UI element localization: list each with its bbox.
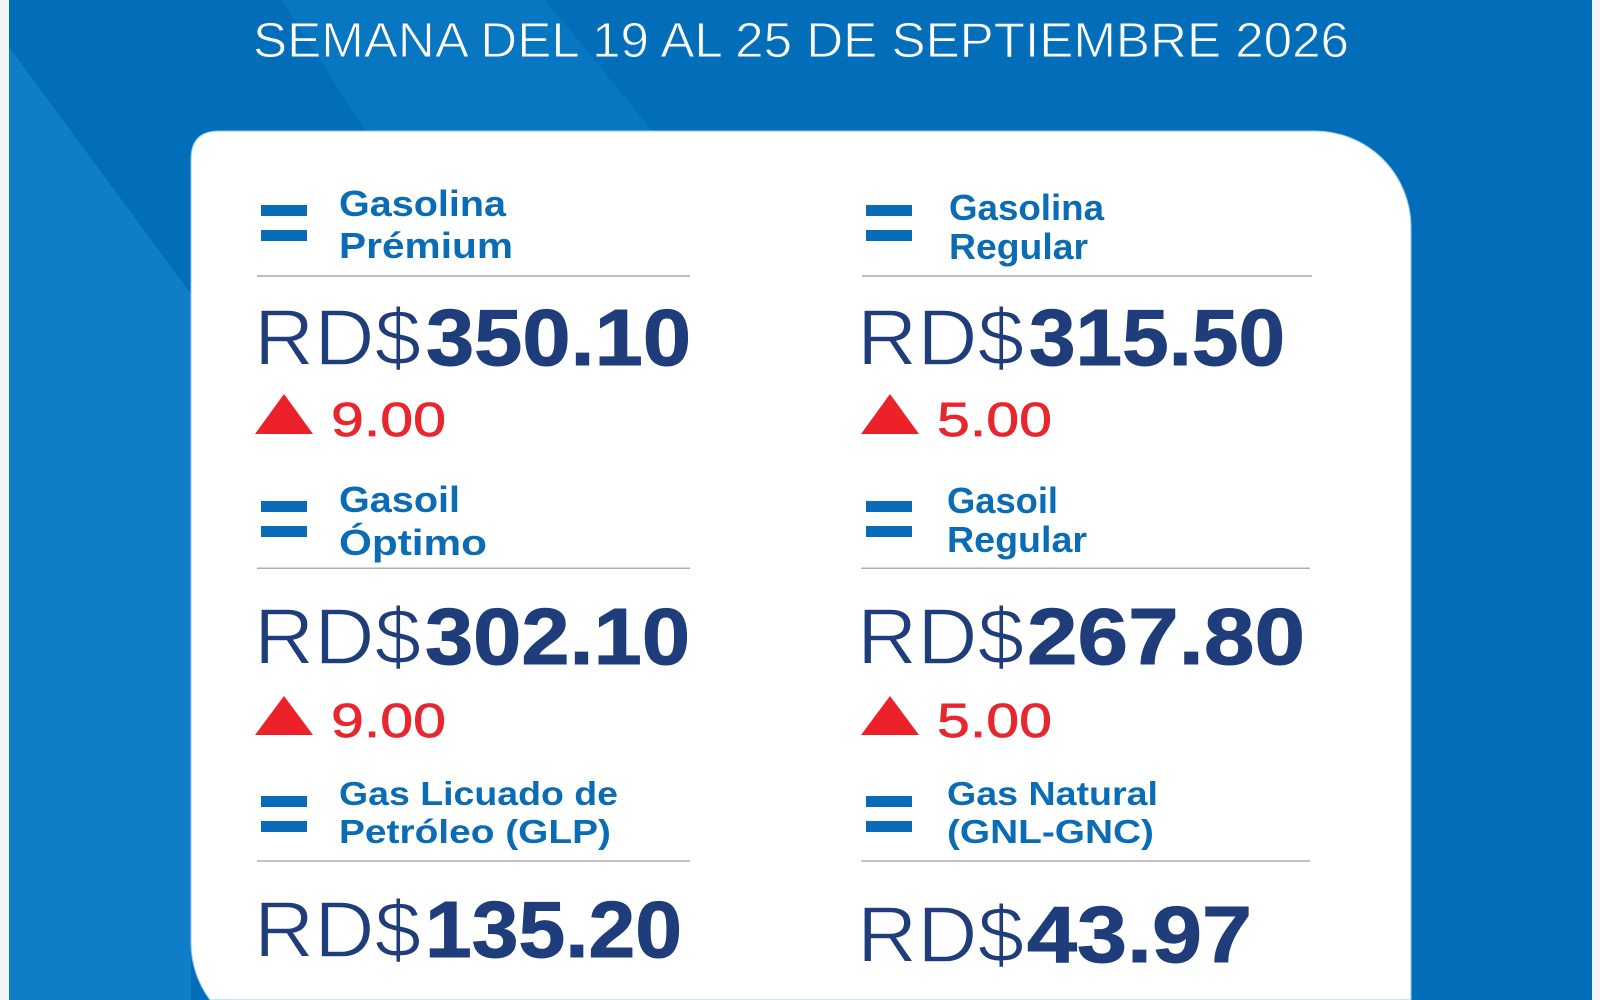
label: (GNL-GNC) [947, 813, 1154, 850]
change up 9.00 [255, 695, 446, 748]
divider [257, 568, 690, 569]
divider [861, 860, 1310, 862]
change up 5.00 [861, 394, 1052, 447]
price: 350.10 [426, 293, 691, 382]
label: Petróleo (GLP) [339, 813, 611, 850]
change up 9.00: 9.00 [331, 394, 446, 447]
price: 302.10 [425, 592, 690, 681]
item: Gas Natural (GNL-GNC) [857, 775, 1310, 979]
item: Gas Licuado de Petróleo (GLP) [254, 775, 690, 974]
label: Regular [949, 226, 1088, 267]
label: Gas Natural [947, 775, 1158, 812]
item: Gasolina Prémium [254, 183, 691, 447]
divider [861, 568, 1310, 569]
price: RD$ [254, 293, 421, 382]
change up 5.00: 5.00 [937, 394, 1052, 447]
change up 5.00: 5.00 [937, 695, 1052, 748]
price: RD$ [254, 592, 421, 681]
item: Gasoil Óptimo [254, 479, 690, 748]
price: RD$ [857, 592, 1024, 681]
label: Gasolina [339, 183, 507, 224]
panel: white price card [191, 131, 1411, 1000]
icon: equal sign [866, 205, 912, 241]
label: Gasolina [949, 187, 1105, 228]
price: RD$ [857, 293, 1024, 382]
item: Gasoil Regular [857, 480, 1310, 748]
label: Óptimo [339, 521, 487, 563]
label: Regular [947, 519, 1087, 560]
change up 9.00: 9.00 [331, 695, 446, 748]
divider [257, 860, 690, 862]
icon: equal sign [866, 501, 912, 537]
price: RD$ [254, 885, 421, 974]
icon: equal sign [261, 205, 307, 241]
icon: equal sign [261, 501, 307, 537]
item: Gasolina Regular [857, 187, 1312, 447]
price: 267.80 [1027, 592, 1305, 681]
divider [257, 275, 690, 277]
change up 5.00 [861, 695, 1052, 748]
label: Gasoil [947, 480, 1058, 521]
divider [862, 275, 1312, 277]
price: 135.20 [425, 885, 682, 974]
icon: equal sign [866, 796, 912, 832]
title: SEMANA DEL 19 AL 25 DE SEPTIEMBRE 2026 [253, 14, 1349, 68]
price: 315.50 [1029, 293, 1285, 382]
price: RD$ [857, 890, 1024, 979]
price: 43.97 [1027, 890, 1252, 979]
label: Gas Licuado de [339, 775, 618, 812]
icon: equal sign [261, 796, 307, 832]
label: Gasoil [339, 479, 460, 520]
label: Prémium [339, 225, 513, 266]
change up 9.00 [255, 394, 446, 447]
